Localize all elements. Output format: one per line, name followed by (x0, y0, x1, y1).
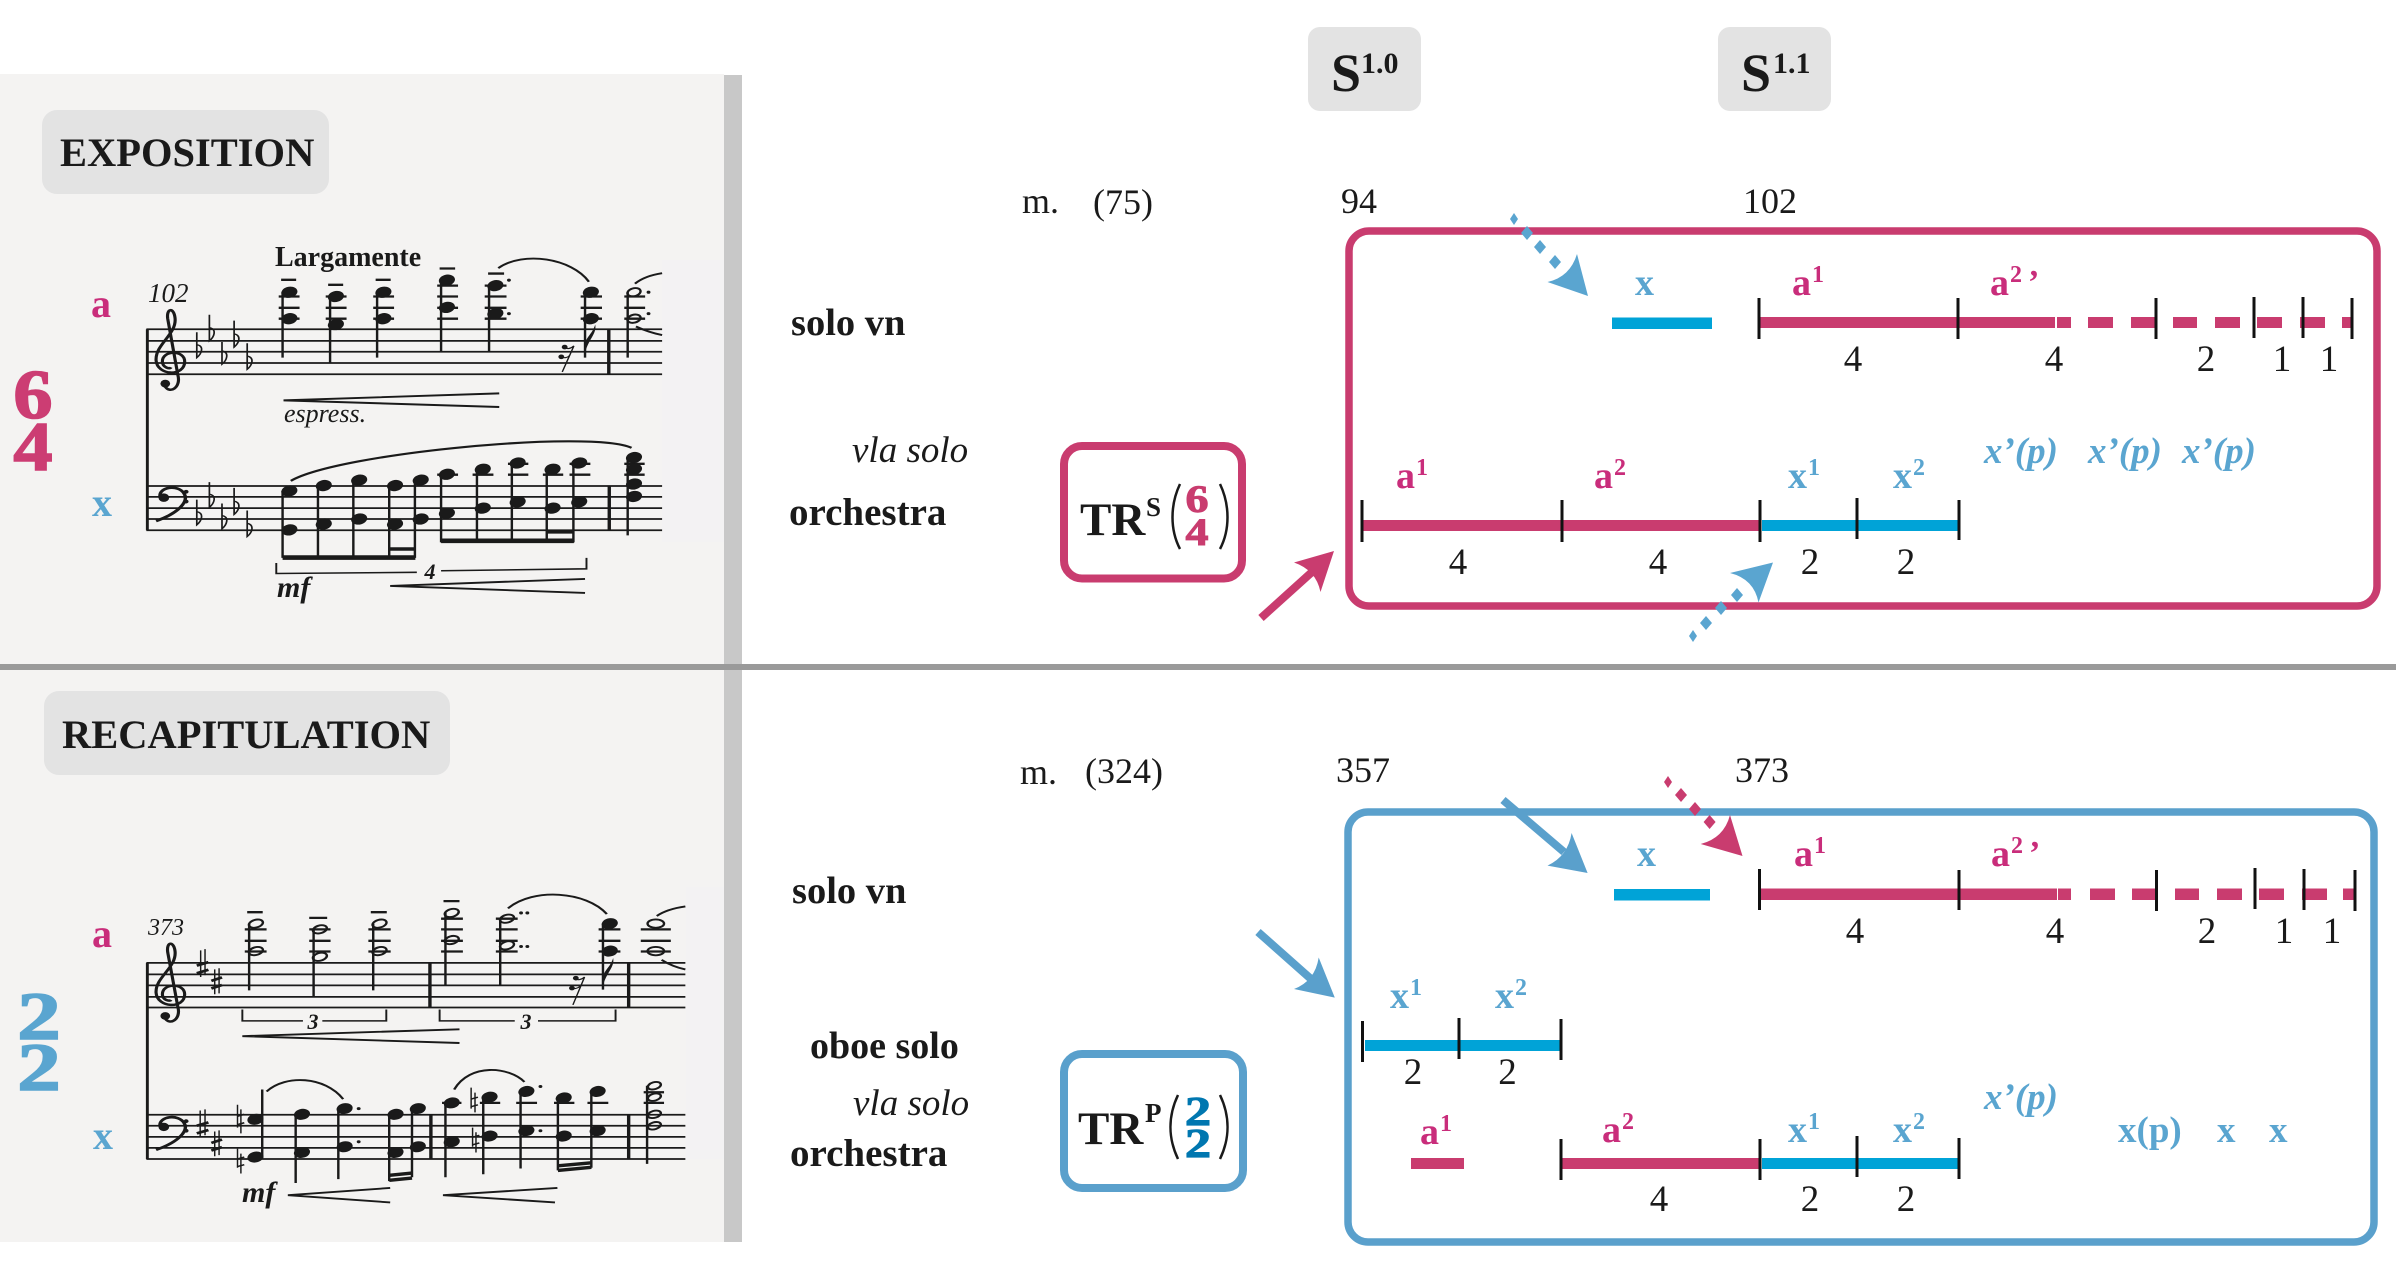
section tag: S 1.1: S (1741, 43, 1771, 103)
section tag: S 1.0: 1.0 (1361, 47, 1398, 80)
row: orchestra recapitulation: x (2217, 1110, 2236, 1151)
arrow: blue into oboe row (1258, 932, 1335, 998)
score: recapitulation excerpt: mf (242, 1176, 278, 1209)
measure numbers: exposition: m. (1022, 181, 1059, 221)
box: TR S six four: 6 (1185, 478, 1209, 521)
row: solo violin exposition: 1 (1812, 262, 1824, 288)
row: orchestra exposition: a (1594, 455, 1613, 497)
arrow: dotted blue into solo x (1510, 213, 1588, 296)
row: oboe solo: x (1390, 975, 1409, 1017)
measure numbers: recapitulation: 373 (1735, 750, 1789, 790)
row: orchestra exposition: 1 (1808, 455, 1820, 481)
panel: exposition timeline frame (1349, 231, 2377, 606)
row: solo violin recapitulation: 2 (2198, 911, 2216, 952)
row: solo violin recapitulation: 4 (1846, 911, 1864, 952)
heading: exposition: EXPOSITION (60, 130, 314, 175)
row: orchestra recapitulation: 2 (1913, 1109, 1925, 1135)
row: orchestra recapitulation: x (1893, 1109, 1912, 1151)
row: orchestra recapitulation: 2 (1622, 1109, 1634, 1135)
row: orchestra recapitulation: x(p) (2118, 1110, 2182, 1151)
row: oboe solo: 2 (1515, 975, 1527, 1001)
row: solo violin recapitulation (1614, 833, 2355, 952)
instrument labels: recapitulation: solo vn (792, 870, 906, 912)
row: orchestra exposition: x’(p) (2181, 431, 2256, 472)
row: oboe solo (1362, 975, 1561, 1093)
row: solo violin recapitulation: 4 (2046, 911, 2064, 952)
row: orchestra recapitulation (1411, 1077, 2288, 1220)
time signature: two two: 2 (17, 978, 61, 1054)
row: orchestra exposition: 2 (1801, 542, 1819, 583)
measure numbers: exposition: 94 (1341, 181, 1377, 221)
time signature: two two (17, 978, 61, 1105)
row: orchestra exposition: a (1396, 455, 1415, 497)
row: solo violin recapitulation: 1 (2323, 911, 2341, 952)
row: orchestra recapitulation: 4 (1650, 1179, 1668, 1220)
row: solo violin recapitulation: x (1637, 833, 1656, 875)
time signature: six four: 4 (13, 409, 53, 486)
label: x theme recapitulation: x (93, 1113, 113, 1158)
time signature: two two: 2 (17, 1029, 61, 1105)
time signature: six four: 6 (13, 357, 53, 434)
arrow: blue into solo x recapitulation (1503, 800, 1588, 873)
row: solo violin exposition: 2 (2197, 339, 2215, 380)
score: recapitulation excerpt: 3 (520, 1009, 532, 1034)
row: orchestra recapitulation: a (1420, 1111, 1439, 1153)
score: recapitulation excerpt: 3 (306, 1009, 318, 1034)
row: orchestra recapitulation: a (1602, 1109, 1621, 1151)
row: solo violin exposition: 1 (2320, 339, 2338, 380)
measure numbers: recapitulation (1020, 750, 1789, 792)
row: oboe solo: x (1495, 975, 1514, 1017)
section tag: S 1.0 (1308, 27, 1421, 111)
measure numbers: recapitulation: (324) (1085, 751, 1163, 791)
row: orchestra exposition: x’(p) (1983, 431, 2058, 472)
row: solo violin exposition: 4 (2045, 339, 2063, 380)
row: orchestra exposition: x (1788, 455, 1807, 497)
score: exposition excerpt: 4 (424, 559, 436, 584)
label: x theme exposition: x (92, 480, 112, 525)
label: a theme exposition: a (91, 281, 111, 326)
instrument labels: recapitulation (790, 870, 969, 1175)
instrument labels: exposition: orchestra (789, 491, 946, 534)
section tag: S 1.0: S (1331, 43, 1361, 103)
box: TR S six four (1064, 446, 1242, 578)
measure numbers: recapitulation: m. (1020, 752, 1057, 792)
score: recapitulation excerpt (146, 895, 685, 1209)
measure numbers: exposition: (75) (1093, 182, 1153, 222)
panel: recapitulation score background (0, 670, 742, 1242)
row: orchestra recapitulation: x (1788, 1109, 1807, 1151)
row: orchestra exposition: 2 (1897, 542, 1915, 583)
instrument labels: exposition: vla solo (852, 430, 968, 471)
score: exposition excerpt: espress. (284, 399, 366, 428)
row: orchestra recapitulation: 2 (1801, 1179, 1819, 1220)
box: TR P two two: 2 (1185, 1089, 1211, 1135)
measure numbers: exposition (1022, 181, 1797, 222)
box: TR P two two: P (1145, 1098, 1162, 1128)
label: a theme recapitulation: a (92, 911, 112, 956)
instrument labels: exposition (789, 302, 968, 534)
score: recapitulation excerpt: 373 (147, 915, 184, 941)
measure numbers: recapitulation: 357 (1336, 750, 1390, 790)
box: TR S six four: 4 (1185, 511, 1209, 554)
arrow: pink into exposition frame (1261, 551, 1334, 618)
row: solo violin exposition: ’ (2028, 264, 2039, 301)
row: orchestra exposition: x’(p) (2087, 431, 2162, 472)
score: exposition excerpt: mf (277, 571, 313, 604)
score: exposition excerpt: Largamente (275, 242, 421, 273)
row: orchestra exposition: 2 (1614, 455, 1626, 481)
row: solo violin exposition: 1 (2273, 339, 2291, 380)
row: orchestra recapitulation: x’(p) (1983, 1077, 2058, 1118)
instrument labels: recapitulation: vla solo (853, 1083, 969, 1124)
row: orchestra recapitulation: 2 (1897, 1179, 1915, 1220)
instrument labels: recapitulation: oboe solo (810, 1025, 959, 1067)
row: orchestra exposition: 1 (1416, 455, 1428, 481)
row: solo violin exposition: a (1990, 262, 2009, 304)
heading: recapitulation: RECAPITULATION (62, 712, 430, 757)
heading: recapitulation (44, 691, 450, 775)
row: orchestra recapitulation: 1 (1440, 1111, 1452, 1137)
arrow: dotted blue into orchestra x (1689, 562, 1773, 642)
box: TR P two two (1064, 1054, 1243, 1188)
section tag: S 1.1 (1718, 27, 1831, 111)
box: TR P two two: TR (1078, 1103, 1144, 1155)
row: solo violin recapitulation: ’ (2029, 835, 2040, 872)
section tag: S 1.1: 1.1 (1773, 47, 1810, 80)
row: orchestra exposition (1362, 431, 2256, 583)
row: solo violin recapitulation: a (1794, 833, 1813, 875)
row: orchestra exposition: 4 (1449, 542, 1467, 583)
row: solo violin exposition: x (1635, 262, 1654, 304)
panel: exposition score background (0, 74, 742, 664)
instrument labels: recapitulation: orchestra (790, 1132, 947, 1175)
row: orchestra recapitulation: 1 (1808, 1109, 1820, 1135)
row: solo violin recapitulation: 1 (1814, 833, 1826, 859)
row: solo violin exposition: 4 (1844, 339, 1862, 380)
box: TR P two two: 2 (1185, 1121, 1211, 1167)
row: oboe solo: 1 (1410, 975, 1422, 1001)
time signature: six four (13, 357, 53, 486)
instrument labels: exposition: solo vn (791, 302, 905, 344)
score: exposition excerpt: 102 (148, 278, 188, 308)
row: oboe solo: 2 (1404, 1052, 1422, 1093)
row: orchestra recapitulation: x (2269, 1110, 2288, 1151)
score: exposition excerpt (146, 242, 662, 604)
arrow: dotted pink into a1 (1664, 776, 1742, 856)
row: solo violin recapitulation: 2 (2011, 833, 2023, 859)
row: orchestra exposition: x (1893, 455, 1912, 497)
panel: recapitulation timeline frame (1348, 812, 2374, 1242)
row: solo violin exposition: a (1792, 262, 1811, 304)
measure numbers: exposition: 102 (1743, 181, 1797, 221)
row: solo violin recapitulation: 1 (2275, 911, 2293, 952)
box: TR S six four: S (1146, 492, 1161, 522)
row: solo violin exposition: 2 (2010, 262, 2022, 288)
row: orchestra exposition: 4 (1649, 542, 1667, 583)
row: solo violin exposition (1612, 262, 2353, 380)
heading: exposition (42, 110, 329, 194)
row: solo violin recapitulation: a (1991, 833, 2010, 875)
row: orchestra exposition: 2 (1913, 455, 1925, 481)
box: TR S six four: TR (1080, 494, 1146, 546)
row: oboe solo: 2 (1498, 1052, 1517, 1093)
